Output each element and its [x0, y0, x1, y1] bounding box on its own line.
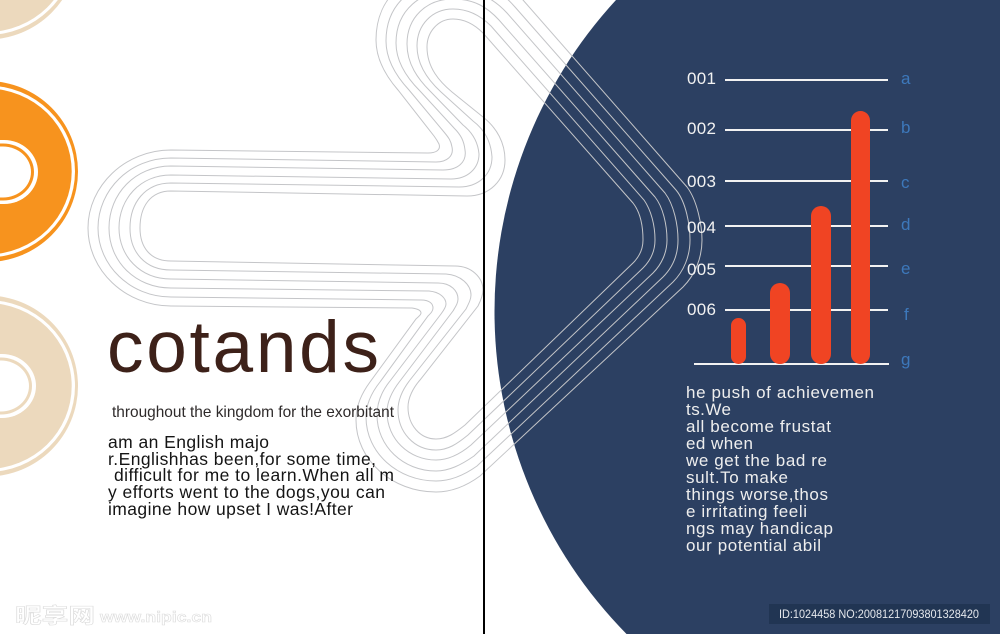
- chart right letter labels: f: [904, 305, 909, 324]
- text block: right body copy: he push of achievemen: [686, 383, 874, 402]
- chart right letter labels: a: [901, 69, 911, 88]
- text block: right body copy: our potential abil: [686, 536, 821, 555]
- chart left number labels: 004: [687, 218, 716, 237]
- icon: lower beige ring: [0, 296, 78, 476]
- text block: left body copy: imagine how upset I was!After: [108, 499, 353, 519]
- subtitle: throughout the kingdom for the exorbitant: [112, 404, 395, 421]
- watermark: site name: [15, 605, 212, 628]
- text block: right body copy: we get the bad re: [685, 451, 827, 470]
- watermark: site name: 昵享网: [15, 605, 95, 628]
- text block: left body copy: am an English majo: [108, 432, 269, 452]
- text block: left body copy: y efforts went to the dogs,you can: [108, 482, 385, 502]
- image ID tag: ID:1024458 NO:20081217093801328420: [779, 607, 979, 621]
- chart grid rules: [694, 79, 889, 365]
- chart right letter labels: b: [901, 118, 910, 137]
- text block: right body copy: sult.To make: [686, 468, 788, 487]
- chart right letter labels: g: [901, 350, 910, 369]
- text block: right body copy: [685, 383, 874, 555]
- concentric winding lines: [88, 0, 702, 492]
- chart: bar chart with rules and labels: [687, 69, 911, 369]
- chart left number labels: 003: [687, 172, 716, 191]
- text block: left body copy: [108, 432, 394, 519]
- chart right letter labels: [901, 69, 911, 369]
- chart left number labels: 001: [687, 69, 716, 88]
- chart right letter labels: d: [901, 215, 910, 234]
- watermark: site name: www.nipic.cn: [99, 609, 212, 626]
- chart left number labels: 002: [687, 119, 716, 138]
- chart right letter labels: e: [901, 259, 910, 278]
- text block: right body copy: ts.We: [686, 400, 731, 419]
- icon: orange ring: [0, 81, 78, 262]
- text block: right body copy: ngs may handicap: [686, 519, 833, 538]
- chart right letter labels: c: [901, 173, 910, 192]
- icon: top beige ring: [0, 0, 78, 40]
- chart left number labels: 005: [687, 260, 716, 279]
- text block: left body copy: difficult for me to learn.When all m: [114, 465, 394, 485]
- title: cotands: [107, 307, 379, 388]
- chart orange bars: [731, 111, 870, 364]
- center divider line: [483, 0, 485, 634]
- chart left number labels: [687, 69, 716, 319]
- text block: left body copy: r.Englishhas been,for some time,: [108, 449, 376, 469]
- image ID tag: [769, 604, 990, 624]
- text block: right body copy: all become frustat: [686, 417, 831, 436]
- text block: right body copy: ed when: [686, 434, 753, 453]
- chart left number labels: 006: [687, 300, 716, 319]
- text block: right body copy: things worse,thos: [686, 485, 828, 504]
- text block: right body copy: e irritating feeli: [686, 502, 807, 521]
- panel: navy circle background: [494, 0, 1000, 634]
